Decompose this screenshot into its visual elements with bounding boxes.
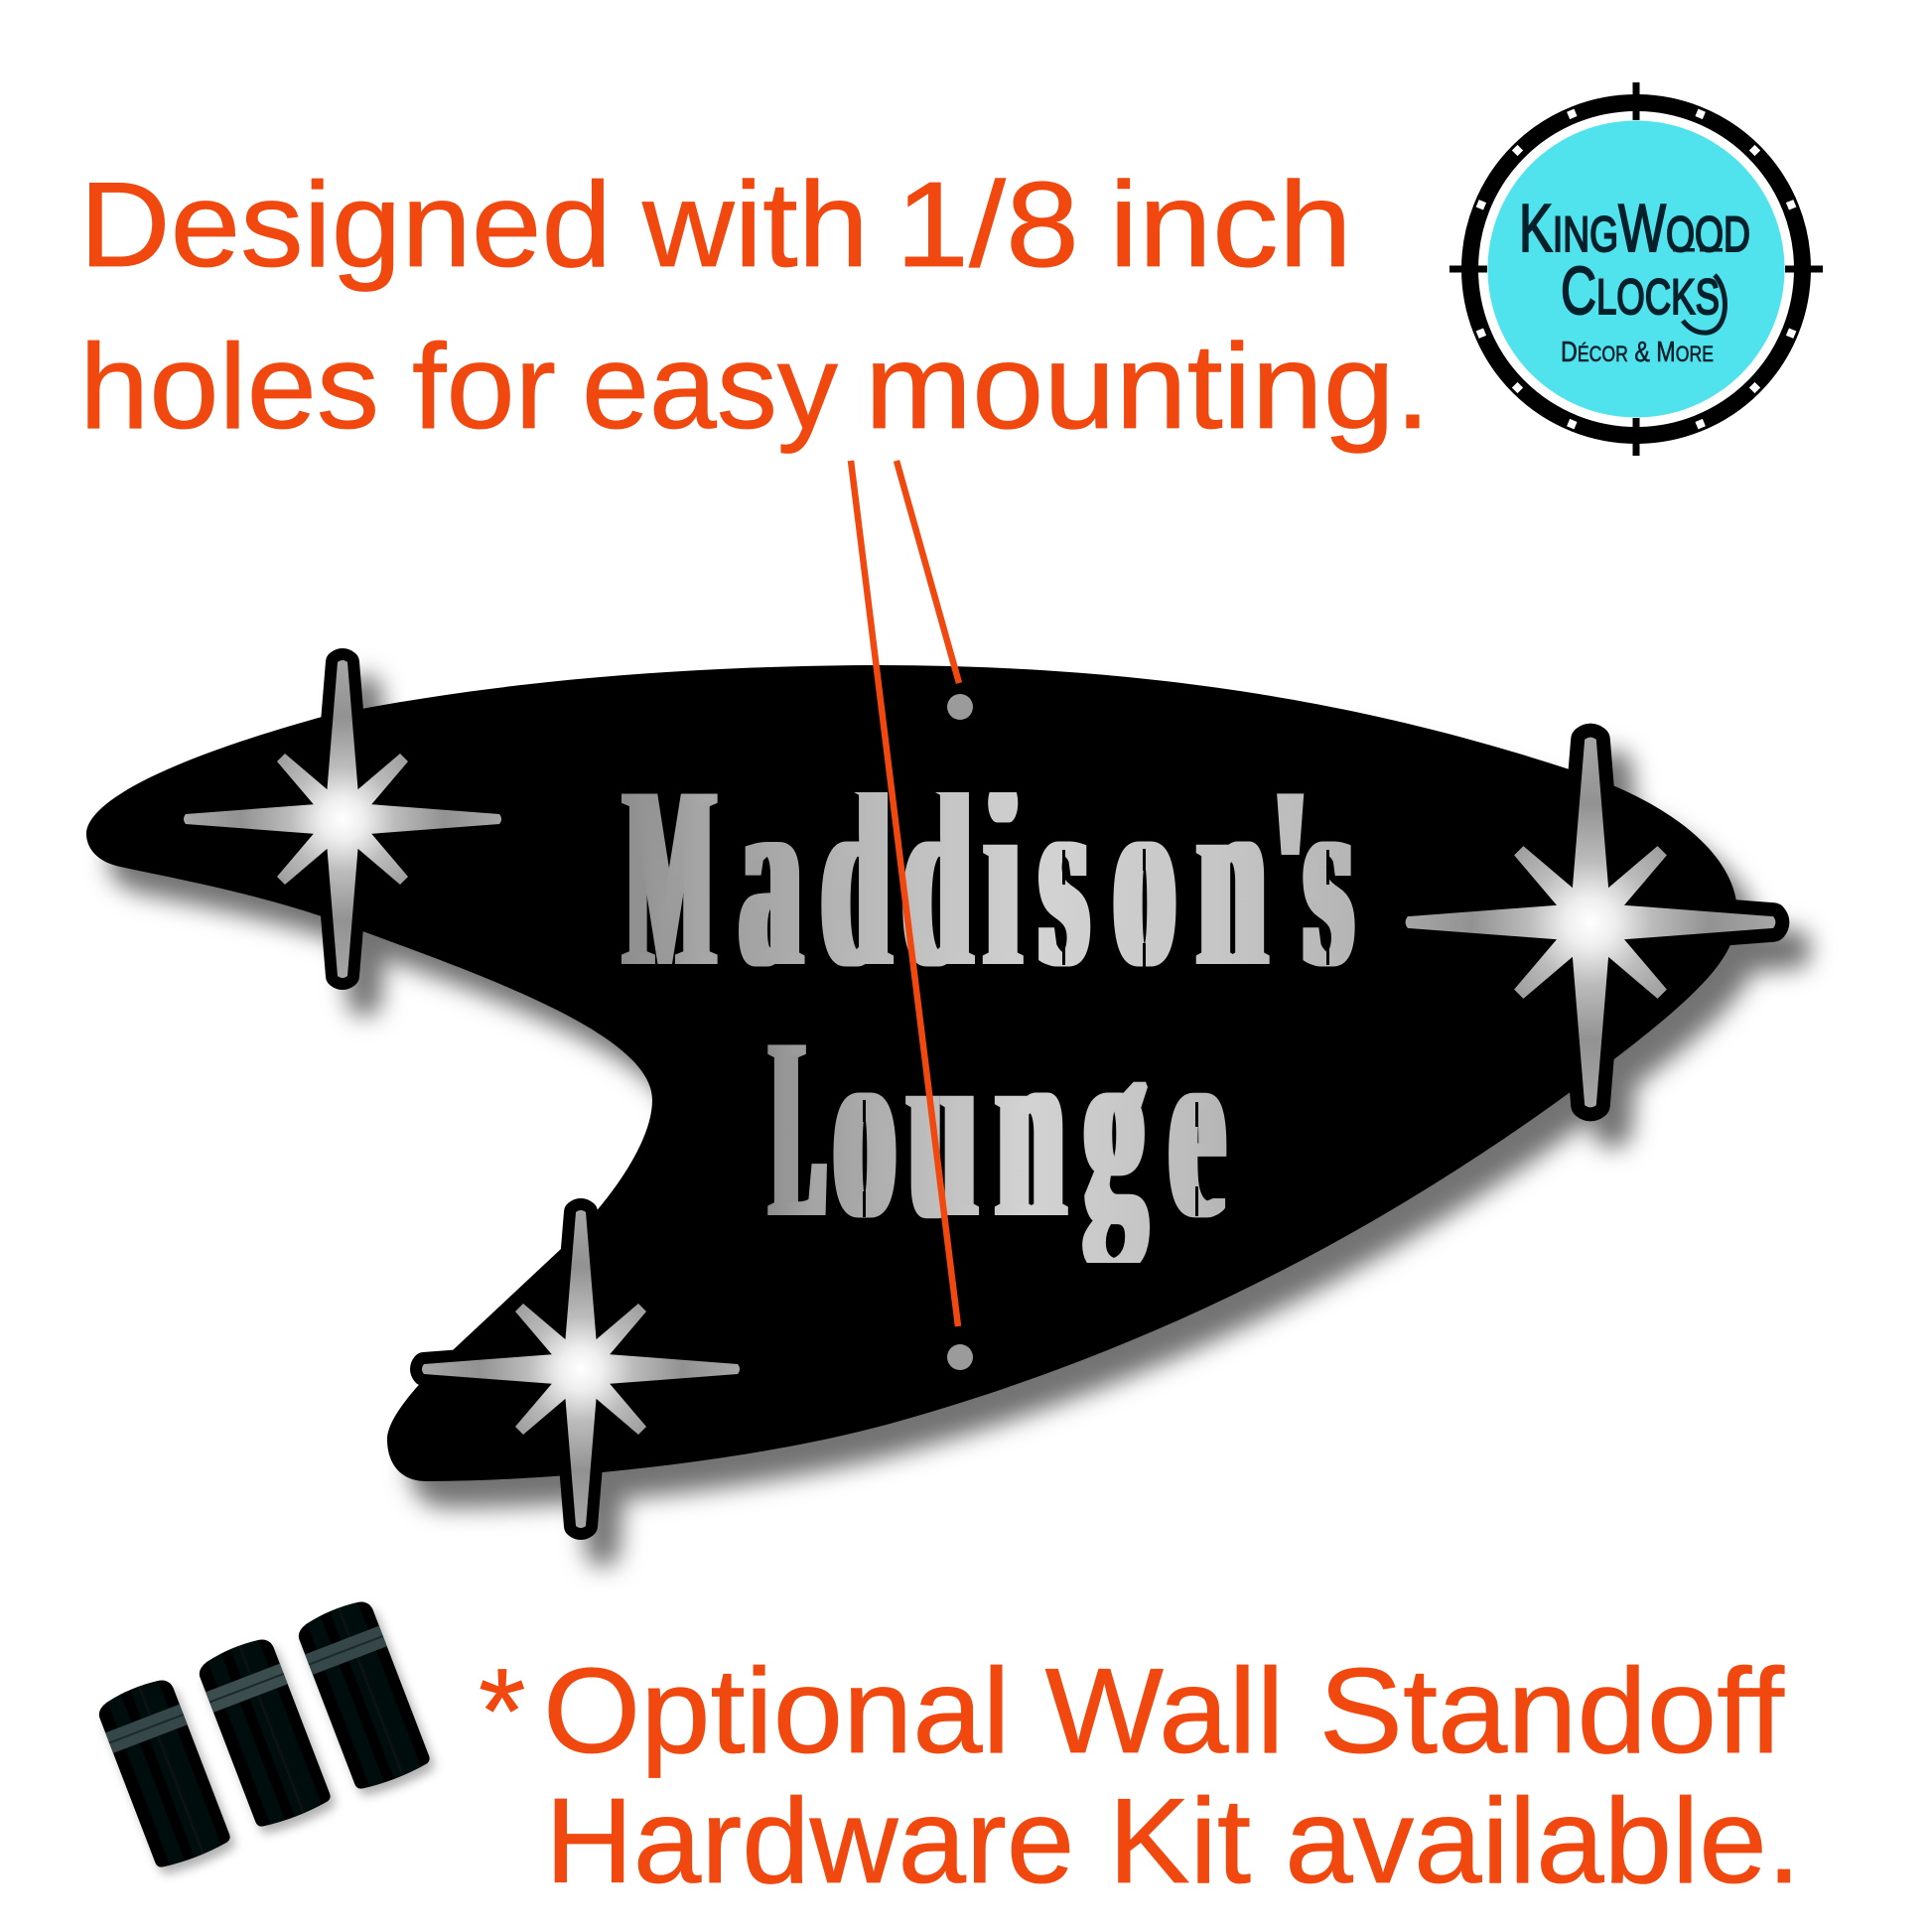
icon: three wall standoffs [94,1596,432,1871]
logo: KingWood Clocks badge [1449,82,1823,456]
callout: optional hardware kit: Hardware Kit available. [545,1773,1801,1908]
sign: boomerang plaque with stars [86,660,1775,1528]
mounting hole: bottom [947,1344,973,1370]
cut-out name: Maddison's: M [625,733,714,1021]
star: bottom [422,1210,740,1528]
heading: mounting holes note: easy [582,319,838,454]
cut-out name: Lounge: L [772,984,824,1272]
sign body with shadow [86,660,1775,1528]
logo: KingWood Clocks badge: DÉCOR & MORE [1561,337,1714,368]
star: left [184,660,501,978]
cut-out name: Lounge: ounge [835,984,1223,1273]
heading: mounting holes note: holes [79,319,379,454]
cut-out name: Lounge [767,1044,1227,1263]
heading: mounting holes note: mounting. [865,319,1431,454]
heading: mounting holes note [79,157,1431,454]
logo: KingWood Clocks badge: KINGWOOD [1519,191,1750,266]
heading: mounting holes note: inch [1109,157,1352,292]
callout: optional hardware kit [479,1643,1801,1908]
cut-out name: Maddison's [621,792,1355,967]
arrow: line to top hole [897,461,959,683]
heading: mounting holes note: 1/8 [896,157,1079,292]
heading: mounting holes note: with [641,157,869,292]
heading: mounting holes note: Designed [79,157,612,292]
star: right [1406,738,1775,1107]
logo: KingWood Clocks badge: CLOCKS [1561,253,1720,329]
cut-out name: Maddison's: addison's [741,733,1352,1022]
mounting hole: top [947,694,973,720]
callout: optional hardware kit: * [479,1643,525,1778]
callout: optional hardware kit: Optional Wall Standoff [543,1643,1785,1778]
heading: mounting holes note: for [412,319,556,454]
arrow: line to bottom hole [851,461,958,1326]
